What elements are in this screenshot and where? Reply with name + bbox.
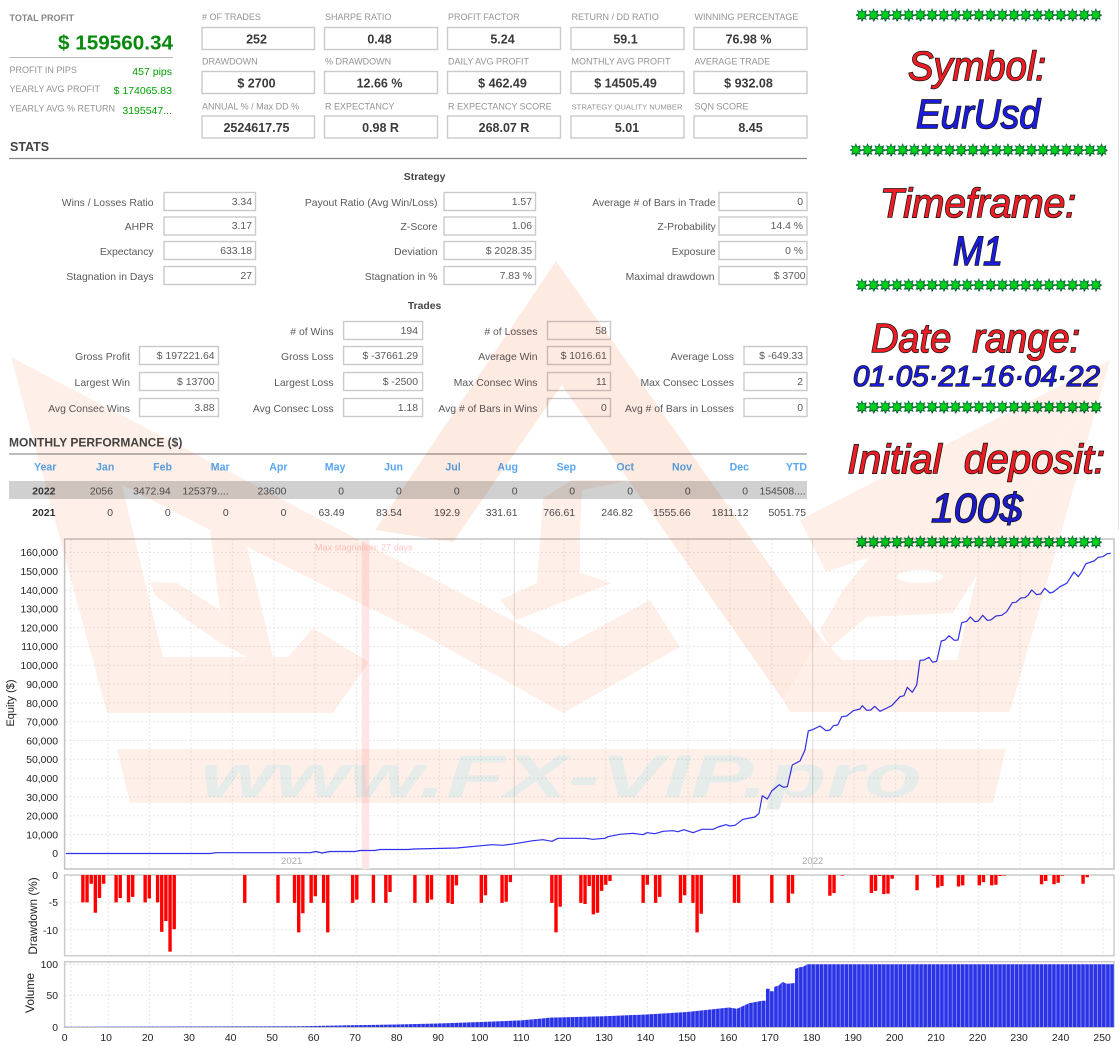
metric values row 2: $ 462.49: [478, 76, 527, 90]
green star divider 4: [856, 400, 1102, 414]
trades values: 2: [797, 377, 803, 388]
trades values: $ 1016.61: [561, 351, 607, 362]
metric labels row 2: MONTHLY AVG PROFIT: [572, 56, 671, 66]
metric values row 3: 8.45: [738, 121, 763, 135]
metric labels row 2: [202, 56, 770, 66]
table header: Feb: [153, 462, 173, 474]
symbol value: EurUsd: [916, 91, 1041, 137]
trade number x axis labels: 80: [391, 1033, 403, 1044]
strategy values: 3.34: [232, 197, 252, 208]
panel: total profit summary: [9, 13, 173, 117]
panel: trades statistics: [48, 301, 807, 416]
row 2021: 5051.75: [768, 508, 806, 519]
volume y axis labels: 50: [46, 991, 58, 1002]
equity y axis labels: 150,000: [20, 567, 58, 578]
yearly average return: [10, 104, 172, 117]
trade number x axis labels: 10: [100, 1033, 112, 1044]
metric values row 2: $ 2700: [237, 76, 276, 90]
metric labels row 1: # OF TRADES: [202, 12, 261, 22]
equity y axis labels: 20,000: [26, 812, 58, 822]
metric values row 1: 76.98 %: [726, 32, 771, 46]
panel: strategy statistics: [62, 172, 807, 284]
row 2021: 0: [165, 508, 171, 519]
table header: Year: [34, 462, 56, 474]
year labels: [281, 856, 823, 867]
metric labels row 3: SQN SCORE: [694, 102, 749, 112]
green star divider 3: [856, 278, 1102, 292]
profit in pips: 457 pips: [132, 66, 172, 78]
metric labels row 1: RETURN / DD RATIO: [572, 12, 659, 22]
equity y axis labels: 0: [52, 849, 58, 860]
green star divider 2: [850, 143, 1107, 157]
strategy labels: Stagnation in Days: [66, 272, 154, 283]
table header: May: [325, 462, 346, 474]
table header: Jun: [384, 462, 403, 474]
timeframe label: Timeframe:: [880, 180, 1076, 226]
trades values: 0: [601, 403, 607, 414]
row 2021: 192.9: [434, 508, 460, 519]
row 2022: 0: [742, 486, 748, 498]
row 2021: 0: [223, 508, 229, 519]
metric labels row 1: WINNING PERCENTAGE: [694, 12, 798, 22]
metric values row 3: 0.98 R: [362, 121, 399, 135]
trade number x axis labels: 250: [1093, 1033, 1111, 1044]
green star divider 1: [856, 8, 1102, 22]
green star divider 5: [856, 535, 1102, 549]
stagnation label: Max stagnation: 27 days: [315, 542, 413, 552]
row 2021: 0: [107, 508, 113, 519]
trade number x axis labels: 110: [513, 1033, 530, 1044]
watermark crown left leg: [375, 261, 562, 542]
trade number x axis labels: 20: [142, 1033, 154, 1044]
equity y axis labels: 70,000: [26, 718, 58, 728]
trade number x axis labels: 60: [308, 1033, 320, 1044]
trade number x axis labels: 140: [637, 1033, 654, 1044]
trades values: $ -2500: [383, 377, 418, 388]
trades boxes: [140, 322, 807, 416]
row 2021: [32, 508, 806, 519]
row 2022: 0: [454, 486, 460, 498]
row 2022: 2056: [90, 486, 113, 498]
table header: Mar: [211, 462, 230, 474]
row 2021: 63.49: [318, 508, 345, 519]
table header: Dec: [730, 462, 749, 474]
chart: equity curve: [5, 539, 1114, 869]
watermark url text: www.FX-VIP.pro: [200, 743, 922, 810]
trade number x axis labels: 100: [471, 1033, 488, 1044]
watermark right tooth: [783, 360, 1110, 712]
volume bars: [65, 964, 1114, 1028]
trades labels: Avg # of Bars in Wins: [438, 404, 538, 415]
table header: Sep: [557, 462, 577, 474]
metric labels row 2: DRAWDOWN: [202, 56, 258, 66]
watermark crown right leg: [556, 261, 820, 700]
strategy labels: AHPR: [125, 222, 154, 233]
equity y axis labels: [20, 548, 58, 860]
metric labels row 1: [202, 12, 798, 22]
trades labels: Largest Loss: [274, 378, 334, 389]
metric values row 3: 268.07 R: [479, 121, 529, 135]
drawdown y axis labels: [43, 871, 58, 937]
strategy heading: Strategy: [404, 172, 446, 183]
row 2022: 3472.94: [133, 486, 171, 498]
trade number x axis labels: 220: [969, 1033, 986, 1044]
metric values row 2: $ 932.08: [724, 76, 773, 90]
trades labels: Largest Win: [75, 378, 130, 389]
row 2021: 0: [281, 508, 287, 519]
trades labels: # of Losses: [484, 327, 538, 338]
row 2022: 0: [512, 486, 518, 498]
row 2022: 23600: [257, 486, 287, 498]
watermark left tooth and chevron: [11, 357, 680, 713]
row 2021: 1555.66: [653, 508, 691, 519]
metric labels row 3: STRATEGY QUALITY NUMBER: [572, 102, 683, 112]
row 2022: 2022: [32, 486, 56, 498]
trades values: $ 13700: [177, 377, 215, 388]
trade number x axis labels: 210: [927, 1033, 945, 1044]
trades values: [157, 326, 803, 414]
watermark url banner: [117, 749, 1006, 803]
metric values row 2: 12.66 %: [357, 76, 402, 90]
trade number x axis labels: 30: [183, 1033, 195, 1044]
metric values row 2: [237, 76, 773, 90]
total profit label: TOTAL PROFIT: [10, 13, 75, 23]
trade number x axis labels: 120: [554, 1033, 571, 1044]
metric values row 1: 0.48: [367, 32, 392, 46]
timeframe value: M1: [953, 228, 1003, 274]
trade number x axis labels: 180: [803, 1033, 820, 1044]
heading: stats: STATS: [10, 140, 49, 154]
drawdown y axis labels: -5: [49, 898, 58, 909]
trade number x axis labels: 230: [1010, 1033, 1028, 1044]
trade number x axis labels: 90: [432, 1033, 444, 1044]
yearly average profit: YEARLY AVG PROFIT: [10, 84, 101, 94]
drawdown bars: [83, 875, 1087, 952]
strategy values: $ 2028.35: [486, 246, 532, 257]
yearly average return: YEARLY AVG % RETURN: [10, 104, 115, 114]
year labels: 2021: [281, 856, 302, 867]
strategy labels: Maximal drawdown: [626, 272, 715, 283]
row 2022: 0: [396, 486, 402, 498]
trades labels: Gross Profit: [75, 352, 130, 363]
drawdown axis title: Drawdown (%): [26, 877, 40, 955]
trades values: $ 197221.64: [157, 351, 215, 362]
yearly average profit: $ 174065.83: [114, 85, 172, 97]
row 2022: 125379....: [182, 486, 229, 498]
table header: Aug: [497, 462, 518, 474]
stagnation band: [362, 540, 369, 869]
trades values: $ -649.33: [759, 351, 803, 362]
date range label: Date range:: [871, 315, 1080, 361]
metric labels row 3: [202, 102, 749, 112]
panel: strategy info: [848, 8, 1107, 549]
trade number x axis labels: 40: [225, 1033, 237, 1044]
trades labels: [48, 327, 734, 415]
trades values: 0: [797, 403, 803, 414]
trades labels: Max Consec Losses: [640, 378, 734, 389]
metric values row 1: 59.1: [613, 32, 638, 46]
metric labels row 3: R EXPECTANCY SCORE: [448, 102, 552, 112]
trade number x axis labels: 200: [886, 1033, 903, 1044]
trades labels: Average Loss: [671, 352, 734, 363]
table: monthly performance: [9, 462, 807, 519]
metric values row 1: 252: [246, 32, 267, 46]
metric labels row 1: PROFIT FACTOR: [448, 12, 520, 22]
equity y axis labels: 90,000: [26, 680, 58, 691]
trades values: 194: [401, 326, 418, 337]
equity y axis labels: 10,000: [26, 830, 58, 842]
trades values: 1.18: [398, 403, 418, 414]
panel: key metric cards: [202, 12, 807, 138]
yearly average profit: [10, 84, 172, 97]
volume y axis labels: 0: [52, 1023, 58, 1034]
equity y axis labels: 120,000: [20, 624, 58, 634]
strategy labels: Payout Ratio (Avg Win/Loss): [305, 198, 438, 209]
row 2021: 246.82: [601, 508, 633, 519]
strategy values: $ 3700: [774, 271, 806, 282]
table header: YTD: [786, 462, 807, 474]
strategy labels: [62, 198, 716, 283]
initial deposit label: Initial deposit:: [848, 436, 1105, 482]
trade number x axis labels: 240: [1052, 1033, 1069, 1044]
trade number x axis labels: 70: [349, 1033, 361, 1044]
trade number x axis labels: 0: [62, 1033, 68, 1044]
trade number x axis labels: 130: [595, 1033, 613, 1044]
strategy values: 0 %: [785, 246, 803, 257]
row 2022: 0: [569, 486, 575, 498]
table header: Nov: [672, 462, 692, 474]
trade number x axis labels: 190: [844, 1033, 862, 1044]
strategy values: 7.83 %: [500, 271, 532, 282]
chart: drawdown bars: [26, 871, 1114, 956]
row 2022: 0: [685, 486, 691, 498]
metric values row 3: [223, 121, 763, 135]
equity y axis labels: 130,000: [20, 604, 58, 616]
strategy values: 27: [240, 271, 252, 282]
trade number x axis labels: 170: [761, 1033, 779, 1044]
watermark: fx-vip logo: [11, 261, 1110, 810]
strategy values: 633.18: [220, 246, 252, 257]
drawdown y axis labels: -10: [43, 926, 58, 937]
table header: [34, 462, 807, 474]
trades values: 58: [595, 326, 607, 337]
trade number x axis labels: [62, 1033, 1111, 1044]
watermark right blob: [800, 360, 1110, 648]
strategy values: 1.57: [512, 197, 532, 208]
equity y axis labels: 100,000: [20, 661, 58, 672]
trade number x axis labels: 160: [720, 1033, 737, 1044]
equity y axis labels: 80,000: [26, 699, 58, 710]
drawdown y axis labels: 0: [52, 871, 58, 882]
strategy labels: Average # of Bars in Trade: [592, 198, 716, 209]
total profit value: $ 159560.34: [58, 32, 173, 54]
metric labels row 3: ANNUAL % / Max DD %: [202, 102, 299, 112]
trades labels: Max Consec Wins: [454, 378, 538, 389]
strategy labels: Stagnation in %: [365, 272, 438, 283]
strategy values: 14.4 %: [771, 221, 803, 232]
trades labels: Average Win: [478, 352, 538, 363]
metric labels row 2: % DRAWDOWN: [325, 56, 391, 66]
metric values row 1: 5.24: [490, 32, 515, 46]
trades labels: Avg # of Bars in Losses: [625, 404, 734, 415]
strategy labels: Exposure: [672, 247, 716, 258]
volume y axis labels: 100: [41, 960, 58, 971]
date range value: 01·05·21-16·04·22: [853, 361, 1100, 393]
metric labels row 3: R EXPECTANCY: [325, 102, 394, 112]
strategy values: 0: [797, 197, 803, 208]
metric values row 2: $ 14505.49: [594, 76, 657, 90]
equity y axis labels: 30,000: [26, 793, 58, 804]
trade number x axis labels: 50: [266, 1033, 278, 1044]
equity axis title: Equity ($): [5, 679, 17, 727]
table header: Jul: [445, 462, 461, 474]
equity y axis labels: 110,000: [21, 642, 58, 653]
strategy labels: Z-Score: [401, 222, 438, 233]
trades labels: Avg Consec Wins: [48, 404, 130, 415]
strategy values: 1.06: [512, 221, 532, 232]
row 2022: 0: [338, 486, 344, 498]
strategy labels: Z-Probability: [657, 222, 716, 233]
equity y axis labels: 160,000: [20, 548, 58, 559]
table header: Oct: [616, 462, 634, 474]
equity y axis labels: 40,000: [26, 774, 58, 785]
equity y axis labels: 50,000: [26, 755, 58, 766]
metric values row 3: 5.01: [615, 121, 639, 135]
equity line: [66, 553, 1111, 854]
trades values: 3.88: [194, 403, 215, 414]
trades values: 11: [596, 377, 607, 388]
initial deposit value: 100$: [931, 485, 1024, 531]
metric labels row 2: DAILY AVG PROFIT: [448, 56, 530, 66]
volume y axis labels: [41, 960, 58, 1034]
trades heading: Trades: [408, 301, 442, 312]
symbol label: Symbol:: [908, 43, 1046, 89]
row 2021: 331.61: [486, 508, 518, 519]
strategy labels: Expectancy: [100, 247, 154, 258]
equity y axis labels: 140,000: [20, 586, 58, 597]
row 2022: [9, 481, 807, 499]
trades labels: # of Wins: [290, 327, 334, 338]
row 2022: 0: [627, 486, 633, 498]
strategy boxes: [164, 192, 807, 284]
strategy labels: Deviation: [394, 247, 438, 258]
row 2021: 766.61: [543, 508, 575, 519]
profit in pips: [10, 65, 172, 78]
strategy labels: Wins / Losses Ratio: [62, 198, 154, 209]
chart: volume bars: [23, 960, 1114, 1044]
trades labels: Avg Consec Loss: [253, 404, 334, 415]
strategy values: [220, 197, 806, 282]
row 2021: 1811.12: [712, 508, 749, 519]
metric boxes: [202, 28, 807, 138]
metric labels row 1: SHARPE RATIO: [325, 12, 391, 22]
metric values row 1: [246, 32, 771, 46]
metric values row 3: 2524617.75: [223, 121, 290, 135]
metric labels row 2: AVERAGE TRADE: [694, 56, 770, 66]
trades labels: Gross Loss: [281, 352, 334, 363]
table header: Apr: [269, 462, 288, 474]
yearly average return: 3195547...: [122, 105, 172, 117]
watermark centre stem: [500, 480, 632, 620]
trade number x axis labels: 150: [678, 1033, 696, 1044]
equity y axis labels: 60,000: [26, 736, 58, 748]
volume axis title: Volume: [23, 973, 37, 1013]
row 2022: 154508....: [759, 486, 806, 498]
row 2021: 83.54: [376, 508, 402, 519]
profit in pips: PROFIT IN PIPS: [10, 65, 77, 75]
strategy values: 3.17: [232, 221, 252, 232]
trades values: $ -37661.29: [363, 351, 418, 362]
heading: monthly performance: MONTHLY PERFORMANCE ($): [9, 436, 182, 450]
row 2021: 2021: [32, 508, 56, 519]
table header: Jan: [96, 462, 114, 474]
year labels: 2022: [802, 856, 823, 867]
